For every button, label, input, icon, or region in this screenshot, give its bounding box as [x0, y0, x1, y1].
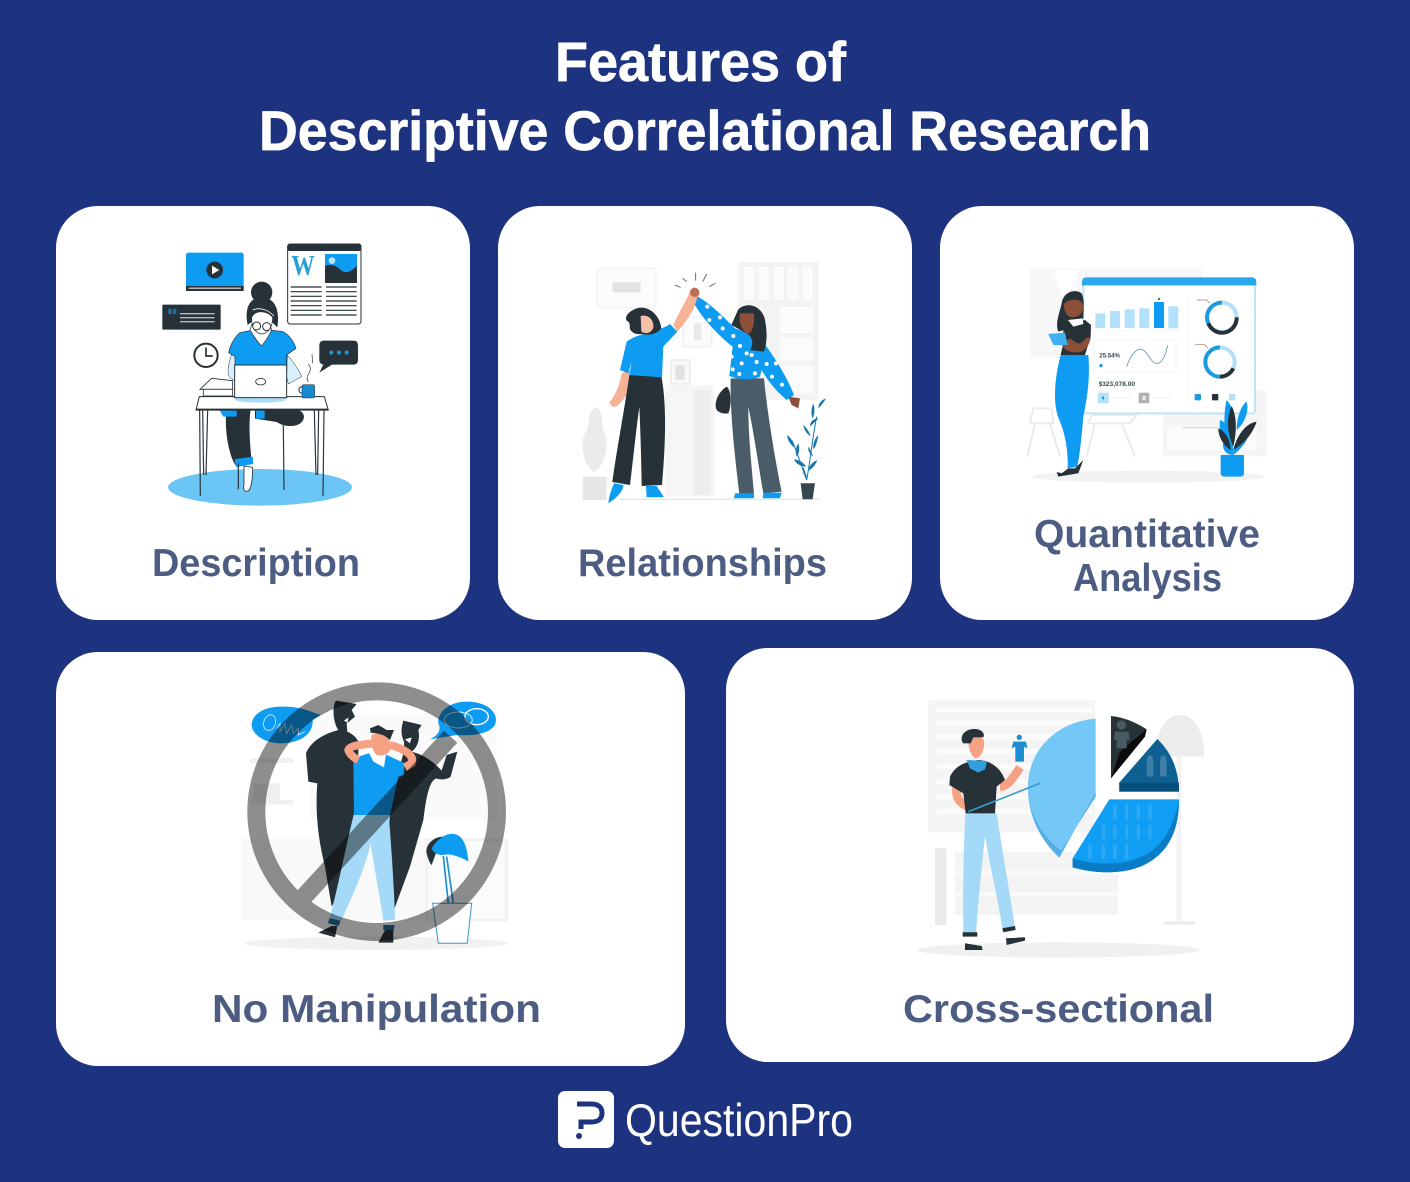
- donut charts: [1195, 300, 1237, 377]
- woman left: [608, 288, 699, 503]
- small person icon: [1012, 735, 1027, 762]
- icon: video player: [186, 253, 244, 291]
- slice: dark: [1111, 716, 1147, 778]
- icon: speech bubble: [319, 341, 358, 373]
- icon: article page: W: [291, 251, 315, 282]
- panel: quantitative analysis: [940, 206, 1354, 620]
- label: quantitative analysis: Quantitative: [1034, 513, 1260, 556]
- shadow figure left: [306, 701, 359, 907]
- logo: QuestionPro: [558, 1091, 853, 1148]
- legend buttons: [1098, 297, 1235, 403]
- icon: clock: [194, 344, 218, 367]
- label: no manipulation: No Manipulation: [212, 988, 541, 1031]
- pie chart: [1028, 716, 1179, 872]
- prohibition sign: [256, 691, 497, 932]
- label: description: Description: [152, 542, 360, 585]
- speech bubble right: [430, 702, 496, 739]
- bar chart: [1095, 298, 1178, 331]
- label: relationships: Relationships: [578, 542, 827, 585]
- woman: [1048, 291, 1091, 477]
- woman: [219, 282, 304, 491]
- woman right: [695, 297, 800, 498]
- background furniture: [1027, 268, 1267, 483]
- man: [949, 729, 1040, 950]
- books: [200, 378, 233, 396]
- speech bubble left: [252, 707, 321, 743]
- icon: note card: [162, 305, 221, 330]
- panel: description: [56, 206, 470, 620]
- illustration: woman with dashboard: [1027, 268, 1267, 483]
- logo mark: [558, 1091, 614, 1148]
- illustration: woman working at a laptop: [162, 244, 361, 506]
- dashboard board: [1082, 277, 1256, 413]
- background furniture: [583, 262, 820, 500]
- label: cross-sectional: Cross-sectional: [903, 988, 1214, 1031]
- slice: blue: [1073, 799, 1179, 872]
- title: [259, 30, 1151, 162]
- background furniture: [242, 713, 508, 950]
- title: Descriptive Correlational Research: [259, 99, 1151, 162]
- mug: [299, 354, 315, 398]
- illustration: man presenting a pie chart: [917, 701, 1204, 958]
- man: [318, 725, 412, 943]
- desk: [196, 397, 328, 496]
- icon: article page: [287, 244, 361, 324]
- logo wordmark: QuestionPro: [625, 1094, 853, 1146]
- plant: [787, 398, 826, 499]
- slice: dark blue: [1119, 739, 1179, 792]
- laptop: [235, 365, 287, 403]
- label: quantitative analysis: [1034, 513, 1260, 600]
- label: quantitative analysis: Analysis: [1073, 557, 1222, 600]
- amount text: $323,078.00: [1099, 382, 1136, 388]
- slice: light blue: [1028, 719, 1096, 858]
- plant: [426, 834, 472, 943]
- line chart card: 25.54%: [1099, 354, 1121, 360]
- illustration: two women high five: [583, 262, 826, 503]
- plant: [1218, 400, 1257, 477]
- shadow figure right: [388, 721, 457, 912]
- line chart card: [1094, 340, 1176, 372]
- sparkle lines: [675, 273, 715, 287]
- panel: cross-sectional: [726, 648, 1354, 1062]
- panel: no manipulation: [56, 652, 685, 1066]
- title: Features of: [555, 30, 846, 93]
- illustration: man with shadows inside prohibition sign: [242, 691, 508, 950]
- panel: relationships: [498, 206, 912, 620]
- background furniture: [917, 701, 1204, 958]
